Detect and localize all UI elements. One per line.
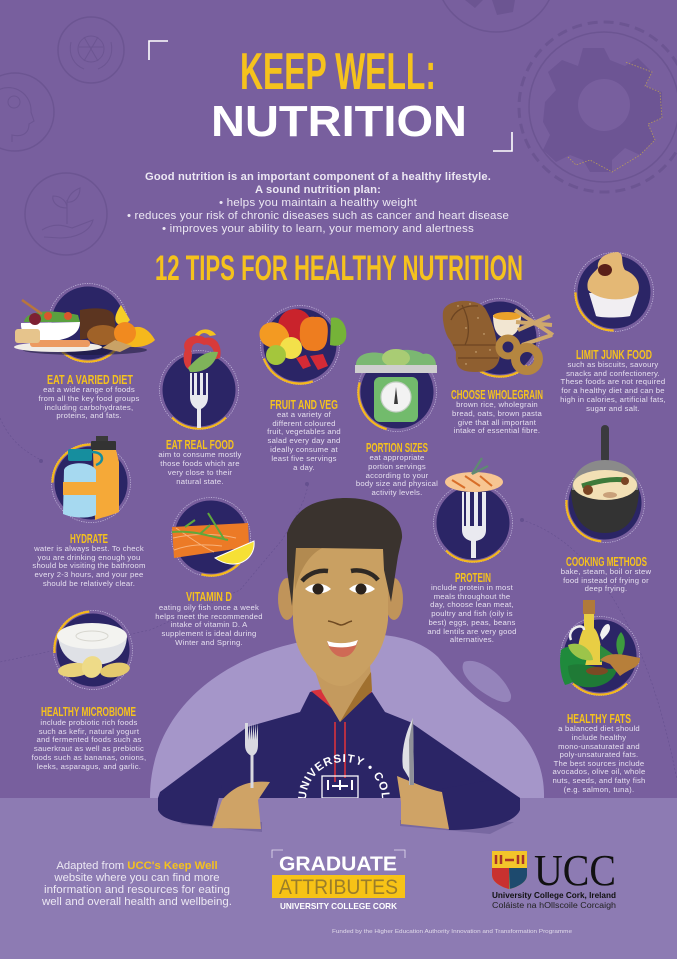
tip: hydrate (32, 427, 147, 588)
text: eating oily fish once a week (159, 603, 259, 612)
text: different coloured (272, 419, 336, 428)
bottom band (0, 798, 677, 959)
icon: yoghurt and banana (37, 594, 149, 706)
heading: VITAMIN D (186, 589, 232, 604)
ears (278, 578, 403, 620)
text: avocados, olive oil, whole (553, 767, 645, 776)
text: nuts, seeds, and fatty fish (552, 776, 646, 785)
text: helps meet the recommended (155, 612, 263, 621)
text: best) eggs, peas, beans (428, 618, 516, 627)
text: from all the key food groups (38, 394, 140, 403)
icon: cupcake (558, 236, 670, 348)
text: bread, oats, brown pasta (452, 409, 542, 418)
icon: hand with plant (25, 173, 107, 255)
text: Winter and Spring. (175, 638, 243, 647)
tip: healthy microbiome (32, 594, 149, 771)
icon: salmon and lemon (157, 483, 265, 591)
text: and lentils are very good (427, 627, 517, 636)
eyes (305, 584, 375, 594)
icon: varied diet plate (14, 284, 155, 362)
tip: fruit and veg (248, 293, 352, 472)
text: include protein in most (431, 583, 514, 592)
text: include healthy (572, 733, 626, 742)
footer text: information and resources for eating (44, 884, 230, 896)
text (560, 360, 666, 413)
heading: FRUIT AND VEG (270, 397, 338, 412)
footer text: Adapted from UCC's Keep Well (56, 860, 218, 872)
icon: hands holding globe (58, 17, 124, 83)
text: should be visiting the bathroom (32, 561, 146, 570)
tip: portion sizes (343, 338, 451, 497)
intro text: • improves your ability to learn, your memory and alertness (162, 223, 474, 235)
tip: vitamin d (155, 483, 265, 647)
text: (e.g. salmon, tuna). (564, 785, 634, 794)
text: salad every day and (268, 436, 340, 445)
text: such as biscuits, savoury (568, 360, 658, 369)
right hand with knife (397, 718, 449, 829)
icon: fork with vegetables (160, 329, 238, 430)
text (356, 453, 438, 497)
tip: eat real food (158, 329, 242, 486)
text: including carbohydrates, (45, 403, 133, 412)
heading: keep well: KEEP WELL: (240, 43, 436, 101)
text (38, 385, 140, 420)
left hand with fork (212, 723, 270, 829)
text: food instead of frying or (563, 576, 649, 585)
text: brown rice, wholegrain (456, 400, 538, 409)
text: eat a variety of (277, 410, 332, 419)
text: The best sources include (554, 759, 644, 768)
text: you are drinking enough you (38, 553, 140, 562)
mouth (327, 640, 358, 657)
text: supplement is ideal during (161, 629, 257, 638)
ucc english: University College Cork, Ireland (492, 891, 616, 900)
text: natural state. (176, 477, 224, 486)
intro text: • helps you maintain a healthy weight (219, 197, 418, 209)
small blob (463, 661, 511, 702)
text: activity levels. (372, 488, 422, 497)
text: and fermented foods such as (36, 735, 142, 744)
icon: weighing scale (343, 338, 451, 446)
text: water is always best. To check (33, 544, 144, 553)
icon: fork with chicken (434, 458, 512, 562)
ucc logo (492, 846, 616, 910)
text: according to your (366, 471, 429, 480)
text: meals throughout the (434, 592, 510, 601)
text: should be relatively clear. (43, 579, 135, 588)
hoodie collar (311, 689, 372, 722)
text: foods such as bananas, onions, (32, 753, 146, 762)
text (267, 410, 341, 472)
logo word graduate: GRADUATE (279, 852, 397, 876)
icon: oil, avocado and nuts (560, 600, 640, 696)
logo university college cork: UNIVERSITY COLLEGE CORK (280, 901, 398, 911)
ucc irish: Coláiste na hOllscoile Corcaigh (492, 901, 616, 910)
tip: protein (427, 458, 517, 644)
text: those foods which are (160, 459, 240, 468)
hoodie strings (335, 722, 345, 782)
icon: water bottles (35, 427, 147, 539)
background blob (150, 634, 544, 798)
intro text: • reduces your risk of chronic diseases such as cancer and heart disease (127, 210, 509, 222)
text: very close to their (168, 468, 232, 477)
text: a day. (293, 463, 315, 472)
hand shadows (180, 816, 514, 834)
text: body size and physical (356, 479, 438, 488)
text: deep frying. (585, 584, 627, 593)
icon: pan with stew (549, 425, 661, 559)
text (552, 724, 646, 794)
eyebrows (302, 570, 378, 581)
hair (287, 498, 402, 606)
neck (313, 665, 372, 722)
text: least five servings (271, 454, 337, 463)
text: portion servings (368, 462, 426, 471)
hoodie crest text: UNIVERSITY • COL (298, 754, 390, 798)
text: eat a wide range of foods (43, 385, 135, 394)
footer text (41, 860, 232, 908)
text: poultry and fish (oily is (431, 609, 513, 618)
corner bracket top-left (149, 41, 168, 60)
text: every 2-3 hours, and your pee (35, 570, 143, 579)
ucc letters: UCC (534, 846, 616, 895)
logo brackets (272, 850, 405, 858)
text (155, 603, 263, 647)
tip: cooking methods (549, 425, 661, 593)
right sleeve (436, 780, 520, 830)
heading: EAT REAL FOOD (166, 437, 234, 452)
icon: head (0, 73, 54, 151)
logo yellow bar (272, 875, 405, 898)
intro text (127, 171, 509, 235)
text (158, 450, 242, 486)
heading: HYDRATE (70, 531, 108, 546)
tip: healthy fats (552, 600, 646, 794)
icon: top circle (436, 0, 556, 32)
forehead shadow (293, 548, 322, 590)
text: high in calories, artificial fats, (560, 395, 666, 404)
corner bracket bottom-right (493, 132, 512, 151)
heading: HEALTHY FATS (567, 711, 631, 726)
icon: bread and bagels (443, 298, 553, 378)
heading: CHOOSE WHOLEGRAIN (451, 387, 543, 402)
text: bake, steam, boil or stew (561, 567, 651, 576)
footer text: website where you can find more (53, 872, 220, 884)
hoodie (158, 690, 520, 798)
intro text: Good nutrition is an important component of a healthy lifestyle. (145, 171, 491, 183)
text (427, 583, 517, 644)
footer text: well and overall health and wellbeing. (41, 896, 232, 908)
text: day, choose lean meat, (430, 600, 514, 609)
text: intake of vitamin D. A (170, 620, 248, 629)
text: for a healthy diet and can be (561, 386, 665, 395)
text: fruit, vegetables and (267, 427, 341, 436)
intro text: A sound nutrition plan: (255, 184, 381, 196)
heading: HEALTHY MICROBIOME (41, 704, 136, 719)
icon: gear (519, 22, 677, 192)
logo word attributes: ATTRIBUTES (279, 876, 398, 899)
text: ideally consume at (270, 445, 338, 454)
heading: EAT A VARIED DIET (47, 372, 133, 387)
text: a balanced diet should (558, 724, 640, 733)
left sleeve (158, 785, 222, 826)
text: poly-unsaturated fats. (560, 750, 638, 759)
heading: PROTEIN (455, 570, 491, 585)
text: snacks and confectionery. (566, 369, 660, 378)
title block (149, 41, 512, 151)
text: mono-unsaturated and (558, 742, 640, 751)
text (561, 567, 651, 593)
text: eat appropriate (369, 453, 425, 462)
icon: fruit (248, 293, 352, 397)
text: include probiotic rich foods (40, 718, 138, 727)
text: aim to consume mostly (158, 450, 242, 459)
tip: choose wholegrain (443, 298, 553, 435)
text: alternatives. (450, 635, 494, 644)
text: sugar and salt. (586, 404, 640, 413)
text: sauerkraut as well as prebiotic (34, 744, 144, 753)
text: such as kefir, natural yogurt (39, 727, 140, 736)
text: proteins, and fats. (56, 411, 122, 420)
graduate attributes logo (272, 850, 405, 911)
funding note: Funded by the Higher Education Authority Innovation and Transformation Programme (332, 929, 572, 935)
text (452, 400, 542, 435)
crest (492, 851, 527, 889)
tip: limit junk food (558, 236, 670, 413)
text (32, 718, 146, 771)
text: leeks, asparagus, and garlic. (37, 762, 141, 771)
tip: eat a varied diet (14, 284, 155, 420)
heading: nutrition: NUTRITION (211, 98, 467, 146)
text: give that all important (458, 418, 537, 427)
connector lines (0, 418, 677, 780)
text: These foods are not required (561, 377, 665, 386)
illustration: student (0, 498, 677, 959)
nose (328, 621, 352, 625)
heading: PORTION SIZES (366, 440, 428, 455)
face (293, 540, 388, 686)
text: intake of essential fibre. (454, 426, 540, 435)
text (32, 544, 146, 588)
